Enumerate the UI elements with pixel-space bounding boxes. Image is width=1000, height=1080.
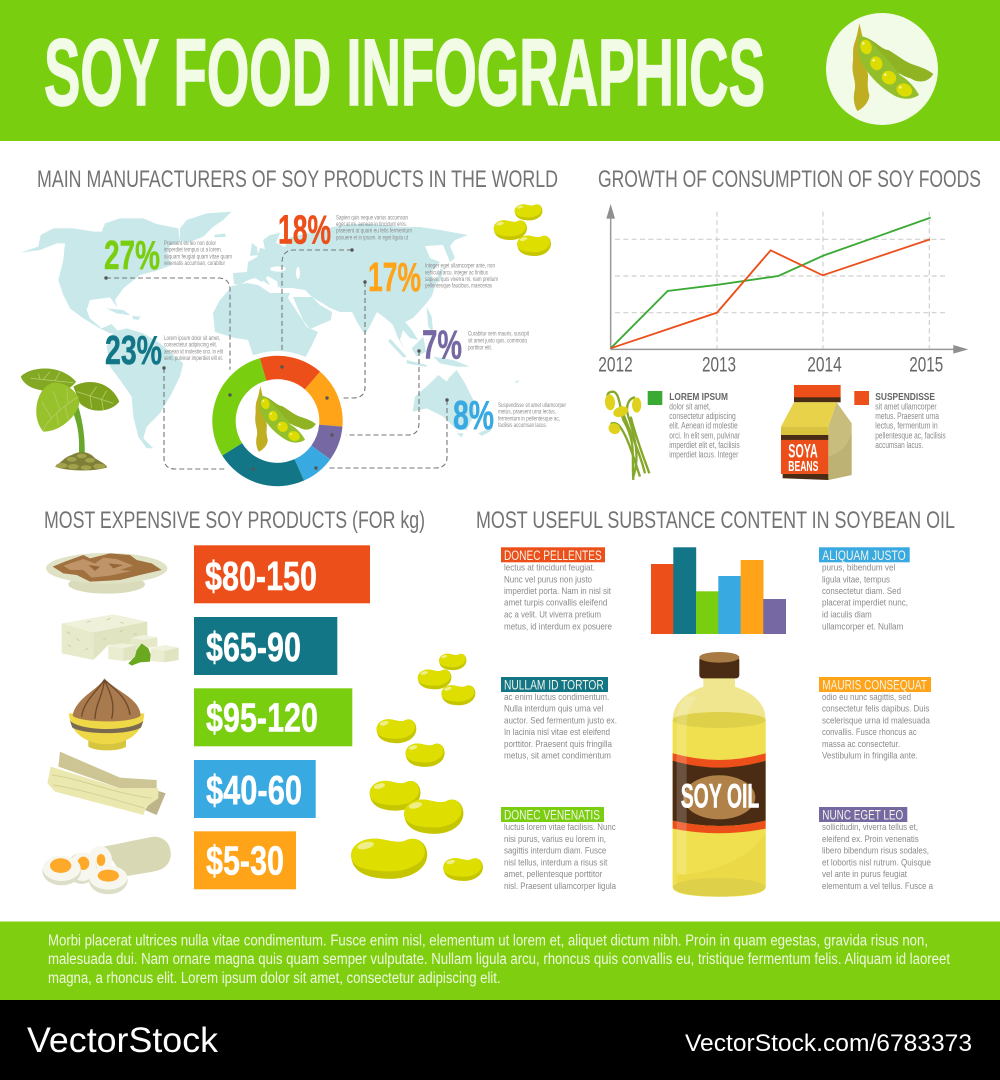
legend: suspendisse: pellentesque ac, facilisis (875, 430, 946, 440)
footer text (48, 932, 951, 987)
callout: 23%: aenean id molestie orci. in elit (164, 348, 223, 355)
icon: soybean sprouts (604, 392, 649, 480)
legend: lorem ipsum: orci. In elit sem, pulvinar (669, 430, 740, 440)
callout: 17% (368, 254, 498, 300)
icon: plate of soy meat (46, 553, 167, 594)
callout: 23%: sem, pulvinar imperdiet elit et. (164, 355, 223, 362)
text block: nullam id tortor: In lacinia nisl vitae est eleifend (504, 726, 610, 737)
text block: nullam id tortor: ac enim luctus condimentum. (504, 691, 609, 702)
text block: mauris consequat (819, 677, 931, 761)
text block: aliquam justo: ALIQUAM JUSTO (822, 548, 906, 563)
text block: nunc eget leo: libero bibendum risus sodales, (822, 845, 929, 856)
callout: 23% (105, 327, 223, 373)
icon: soya beans bag: SOYA (788, 442, 818, 463)
legend: lorem ipsum: dolor sit amet, (669, 401, 711, 411)
chart year labels: 2012 (598, 354, 633, 377)
price bar: blue: $40-60 (206, 767, 302, 813)
text block: nullam id tortor (501, 677, 617, 761)
callout: 17%: pellentesque faucibus, maecenas (425, 283, 492, 290)
watermark band (0, 1000, 1000, 1080)
callout: 27%: 27% (104, 232, 160, 278)
legend: suspendisse (854, 391, 946, 450)
connector dots (104, 248, 449, 471)
chart year labels: 2014 (807, 354, 842, 377)
callout: 18%: Sapien quis neque varius accumsan (336, 214, 408, 221)
icon: soya beans bag: BEANS (788, 458, 818, 475)
connector lines (106, 250, 447, 469)
text block: nunc eget leo: sollicitudin, viverra tellus et, (822, 821, 918, 832)
callout: 18%: praesent at quam eu felis fermentum (336, 228, 412, 235)
text block: mauris consequat: convallis. Fusce rhoncus ac (822, 726, 917, 737)
text block: nullam id tortor: auctor. Sed fermentum justo ex. (504, 714, 617, 725)
legend: suspendisse: SUSPENDISSE (875, 391, 935, 403)
text block: donec venenatis: DONEC VENENATIS (504, 807, 600, 822)
text block: nullam id tortor: NULLAM ID TORTOR (504, 677, 604, 692)
legend: suspendisse: sit amet ullamcorper (875, 401, 937, 411)
callout: 7% (422, 321, 529, 367)
callout: 7%: porttitor elit. (468, 344, 492, 351)
donut chart (208, 351, 348, 491)
icon: scattered beans (351, 654, 483, 881)
callout: 8%: 8% (453, 392, 494, 438)
callout: 27% (104, 232, 232, 278)
text block: nunc eget leo: elementum a vel tellus. Fusce a (822, 880, 934, 891)
text block: nunc eget leo: vel ante in purus feugiat (822, 868, 907, 879)
text block: aliquam justo: placerat imperdiet nunc, (822, 597, 908, 608)
callout: 8%: Suspendisse sit amet ullamcorper (498, 402, 566, 409)
icon: three beans (494, 204, 551, 256)
callout: 17%: vehicula arcu. integer ac finibus (425, 269, 488, 276)
text block: nullam id tortor: metus, sit amet condimentum (504, 750, 611, 761)
callout: 27%: imperdiet tempus ut a lorem. (164, 247, 222, 254)
text block: donec venenatis (501, 807, 617, 891)
callout: 7%: sit amet justo quis, commodo (468, 338, 527, 345)
price bar: green: $95-120 (206, 695, 318, 741)
text block: mauris consequat: consectetur felis dapibus. Duis (822, 703, 930, 714)
text block: donec venenatis: nisi purus, varius eu lorem in, (504, 833, 606, 844)
text block: donec venenatis: amet, pellentesque porttitor (504, 868, 602, 879)
text block: mauris consequat: Vestibulum in fringilla ante. (822, 750, 918, 761)
icon: soya beans bag (781, 385, 852, 480)
text block: mauris consequat: scelerisque urna id malesuada (822, 714, 931, 725)
text block: nunc eget leo: eleifend ex. Proin venenatis (822, 833, 919, 844)
icon: seedling (21, 369, 119, 470)
legend: lorem ipsum: elit. Aenean id molestie (669, 421, 738, 431)
text block: mauris consequat: odio eu nunc sagittis, sed (822, 691, 911, 702)
callout: 18%: eget at mi. aenean in tincidunt eros. (336, 221, 407, 228)
legend: lorem ipsum: imperdiet lacus. Integer (669, 450, 738, 460)
text block: donec venenatis: luctus lorem vitae facilisis. Nunc (504, 821, 616, 832)
icon: pods in donut (255, 386, 316, 452)
text block: donec venenatis: nisl. Praesent ullamcorper ligula (504, 880, 617, 891)
callout: 18%: posuere et in ipsum. in eget ligula ut (336, 234, 408, 241)
text block: donec pellentes: ac a velit. Ut viverra pretium (504, 609, 601, 620)
legend: lorem ipsum (648, 391, 740, 460)
callout: 23%: Lorem ipsum dolor sit amet, (164, 335, 220, 342)
text block: donec pellentes: imperdiet porta. Nam in nisl sit (504, 585, 611, 596)
legend: lorem ipsum: imperdiet elit et, facilisis (669, 440, 740, 450)
chart year labels: 2015 (909, 354, 943, 377)
price bar: orange (194, 831, 296, 889)
icon: bowl of soy paste (69, 678, 144, 750)
watermark logo: VectorStock (27, 1021, 219, 1060)
callout: 8%: facilisis accumsan lacus. (498, 422, 547, 429)
legend: lorem ipsum: consectetur adipiscing (669, 411, 736, 421)
text block: aliquam justo: purus, bibendum vel (822, 562, 895, 573)
footer band (0, 922, 1000, 1000)
text block: donec venenatis: sagittis interdum diam. Fusce (504, 845, 606, 856)
callout: 23%: consectetur adipiscing elit. (164, 342, 217, 349)
text block: nunc eget leo: NUNC EGET LEO (822, 807, 903, 822)
legend: suspendisse: metus. Praesent urna (875, 411, 939, 421)
text block: donec pellentes: Nunc vel purus non justo (504, 573, 592, 584)
callout: 8%: metus, praesent urna lectus, (498, 409, 556, 416)
heading: manufacturers: MAIN MANUFACTURERS OF SOY PRODUCTS IN THE WORLD (37, 166, 558, 193)
callout: 27%: aliquam feugiat quam vitae quam (164, 253, 232, 260)
callout: 27%: venenatis accumsan, curabitur (164, 260, 225, 267)
icon: soy oil bottle (673, 652, 766, 897)
header band (0, 0, 1000, 141)
callout: 17%: sapien, quis viverra mi. nam pretium (425, 276, 498, 283)
callout: 18%: 18% (278, 206, 331, 252)
bar chart: substances (651, 547, 786, 634)
text block: nunc eget leo: et lobortis nisl rutrum. Quisque (822, 856, 931, 867)
text block: donec pellentes: amet turpis convallis eleifend (504, 597, 607, 608)
chart year labels: 2013 (702, 354, 736, 377)
callout: 8% (453, 392, 566, 438)
text block: donec pellentes: metus, id interdum ex posuere (504, 620, 612, 631)
footer text: magna, a rhoncus elit. Lorem ipsum dolor sit amet, consectetur adipiscing elit. (48, 970, 501, 987)
text block: aliquam justo: consectetur diam. Sed (822, 585, 901, 596)
callout: 8%: fermentum in pellentesque ac, (498, 415, 560, 422)
text block: aliquam justo (819, 547, 910, 631)
price bar: orange: $5-30 (206, 837, 284, 883)
text block: mauris consequat: MAURIS CONSEQUAT (822, 677, 927, 692)
chart year labels (598, 354, 943, 377)
text block: nullam id tortor: Nulla interdum quis urna vel (504, 703, 603, 714)
text block: nullam id tortor: porttitor. Praesent quis fringilla (504, 738, 613, 749)
icon: egg tofu roll (42, 837, 171, 894)
text block: donec pellentes (501, 547, 612, 631)
world map (21, 212, 520, 448)
callout: 7%: 7% (422, 321, 462, 367)
callout: 27%: Praesent eu leo non dolor (164, 240, 216, 247)
callout: 17%: 17% (368, 254, 421, 300)
price bar: red (194, 545, 370, 603)
icon: tofu (62, 614, 179, 666)
text block: aliquam justo: ligula vitae, tempus (822, 573, 890, 584)
text block: aliquam justo: id iaculis diam (822, 609, 872, 620)
legend: lorem ipsum: LOREM IPSUM (669, 391, 728, 403)
text block: donec venenatis: nisl tellus, interdum a risus sit (504, 856, 608, 867)
callout: 18% (278, 206, 412, 252)
price bar: blue (194, 760, 316, 818)
icon: soybean pods in circle (826, 13, 938, 125)
legend: suspendisse: lectus, fermentum in (875, 421, 938, 431)
callout: 17%: Integer eget ullamcorper ante, non (425, 263, 495, 270)
text block: donec pellentes: lectus at tincidunt feugiat. (504, 562, 595, 573)
price bar: teal: $65-90 (206, 624, 301, 670)
text block: donec pellentes: DONEC PELLENTES (504, 548, 602, 563)
callout: 23%: 23% (105, 327, 162, 373)
text block: aliquam justo: ullamcorper et. Nullam (822, 620, 903, 631)
icon: soy oil bottle: SOY OIL (681, 778, 759, 816)
legend: suspendisse: accumsan lacus. (875, 440, 923, 450)
text block: nunc eget leo (819, 807, 934, 891)
callout: 7%: Curabitur sem mauris, suscipit (468, 331, 529, 338)
heading: expensive products: MOST EXPENSIVE SOY PRODUCTS (FOR kg) (44, 507, 425, 534)
line chart (606, 204, 968, 354)
watermark url: VectorStock.com/6783373 (685, 1030, 972, 1057)
price bar: red: $80-150 (205, 553, 317, 599)
text block: mauris consequat: massa ac consectetur. (822, 738, 900, 749)
icon: dried yuba sticks (47, 752, 166, 815)
